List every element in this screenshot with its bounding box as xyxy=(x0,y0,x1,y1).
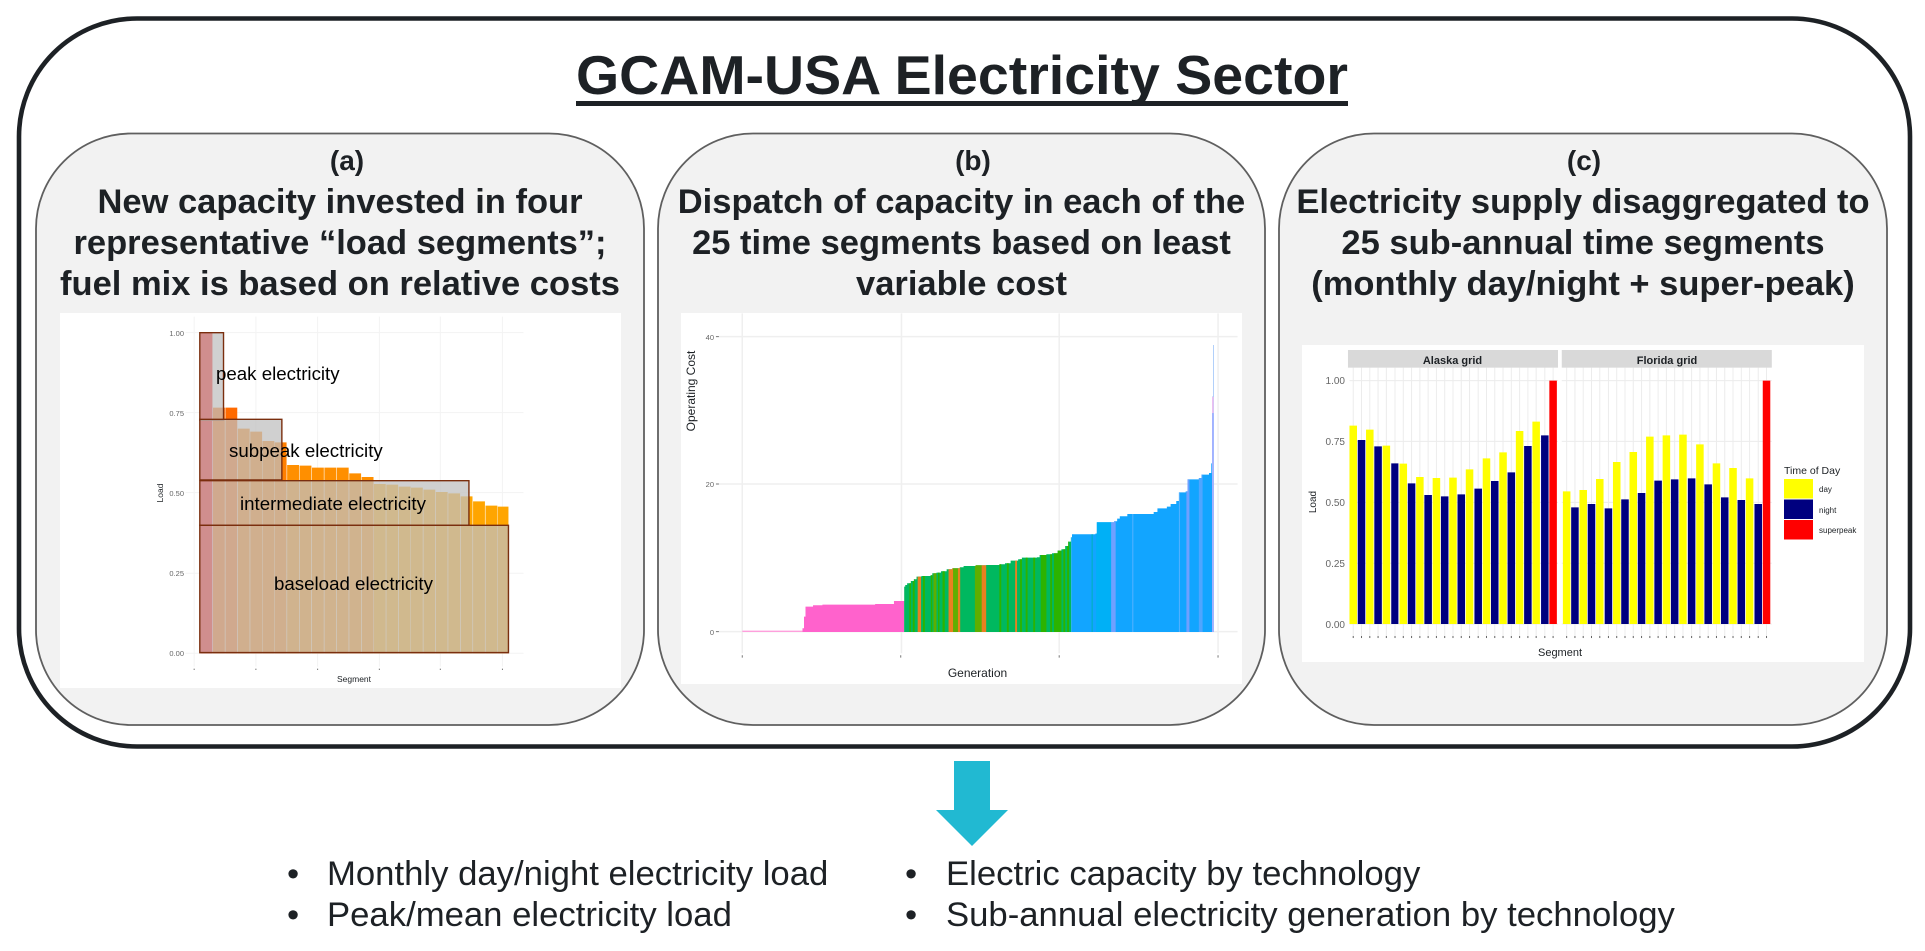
panel: (c) time segments xyxy=(1279,134,1887,725)
chart: dispatch curve: 40 xyxy=(706,333,714,342)
chart: load by time of day: Florida grid xyxy=(1637,355,1697,367)
outputs: right column: • xyxy=(905,855,917,893)
panel (a) heading: representative “load segments”; xyxy=(73,224,607,262)
chart: load by time of day: Load xyxy=(1308,491,1319,513)
chart: load duration with segments: 0.00 xyxy=(169,649,184,658)
label: baseload electricity: baseload electricity xyxy=(274,573,434,594)
panel (c) heading: (c) xyxy=(1567,145,1601,176)
chart: dispatch curve: 0 xyxy=(710,628,714,637)
panel (a) heading: (a) xyxy=(330,145,364,176)
label: intermediate electricity: intermediate electricity xyxy=(240,493,427,514)
outputs: left column xyxy=(287,855,828,934)
panel (b) heading: variable cost xyxy=(856,265,1067,303)
chart: load duration with segments: 0.50 xyxy=(169,489,184,498)
outputs: right column xyxy=(905,855,1676,934)
chart: load duration with segments xyxy=(60,313,621,688)
legend: time of day: night xyxy=(1819,506,1837,515)
chart: dispatch curve: 20 xyxy=(706,480,714,489)
panel (a) heading: New capacity invested in four xyxy=(97,183,583,221)
outputs: left column: Peak/mean electricity load xyxy=(327,896,732,934)
legend: time of day xyxy=(1784,465,1857,540)
chart: load duration with segments: Load xyxy=(155,483,165,502)
chart: dispatch curve: Operating Cost xyxy=(684,350,698,431)
outputs: left column: Monthly day/night electricity load xyxy=(327,855,828,893)
chart: load duration with segments: 0.75 xyxy=(169,409,184,418)
chart: load by time of day xyxy=(1302,345,1864,662)
chart: load by time of day: 0.25 xyxy=(1326,559,1345,570)
panel (b) heading: (b) xyxy=(955,145,991,176)
panel (c) heading: 25 sub-annual time segments xyxy=(1341,224,1825,262)
outputs: right column: • xyxy=(905,896,917,934)
legend: time of day: Time of Day xyxy=(1784,465,1841,477)
panel (a) heading: fuel mix is based on relative costs xyxy=(60,265,620,303)
panel (b) heading: 25 time segments based on least xyxy=(692,224,1231,262)
panel (b) heading xyxy=(678,145,1245,303)
label: peak electricity: peak electricity xyxy=(216,363,340,384)
chart: load by time of day: 0.00 xyxy=(1326,620,1345,631)
chart: load duration with segments: 0.25 xyxy=(169,569,184,578)
chart: load by time of day: Segment xyxy=(1538,647,1582,659)
outputs: right column: Electric capacity by technology xyxy=(946,855,1421,893)
chart: load by time of day: Alaska grid xyxy=(1423,355,1482,367)
label: subpeak electricity: subpeak electricity xyxy=(229,440,383,461)
panel (b) heading: Dispatch of capacity in each of the xyxy=(678,183,1245,221)
title: GCAM-USA Electricity Sector xyxy=(576,44,1348,106)
chart: load by time of day: 0.50 xyxy=(1326,498,1345,509)
main container xyxy=(19,18,1910,746)
outputs: left column: • xyxy=(287,896,299,934)
chart: dispatch curve xyxy=(681,313,1242,684)
panel (a) heading xyxy=(60,145,620,303)
legend: time of day: day xyxy=(1819,485,1832,494)
panel (c) heading: Electricity supply disaggregated to xyxy=(1296,183,1870,221)
legend: time of day: superpeak xyxy=(1819,526,1857,535)
chart: load by time of day: 1.00 xyxy=(1326,376,1345,387)
panel (c) heading xyxy=(1296,145,1870,303)
chart: load duration with segments: Segment xyxy=(337,674,372,684)
chart: load duration with segments: 1.00 xyxy=(169,329,184,338)
arrow: down xyxy=(936,761,1008,846)
panel (c) heading: (monthly day/night + super-peak) xyxy=(1311,265,1855,303)
chart: load by time of day: 0.75 xyxy=(1326,437,1345,448)
outputs: left column: • xyxy=(287,855,299,893)
chart: dispatch curve: Generation xyxy=(948,666,1007,680)
panel: (b) dispatch xyxy=(658,134,1265,725)
outputs: right column: Sub-annual electricity generation by technology xyxy=(946,896,1676,934)
panel: (a) load segments xyxy=(36,134,644,725)
